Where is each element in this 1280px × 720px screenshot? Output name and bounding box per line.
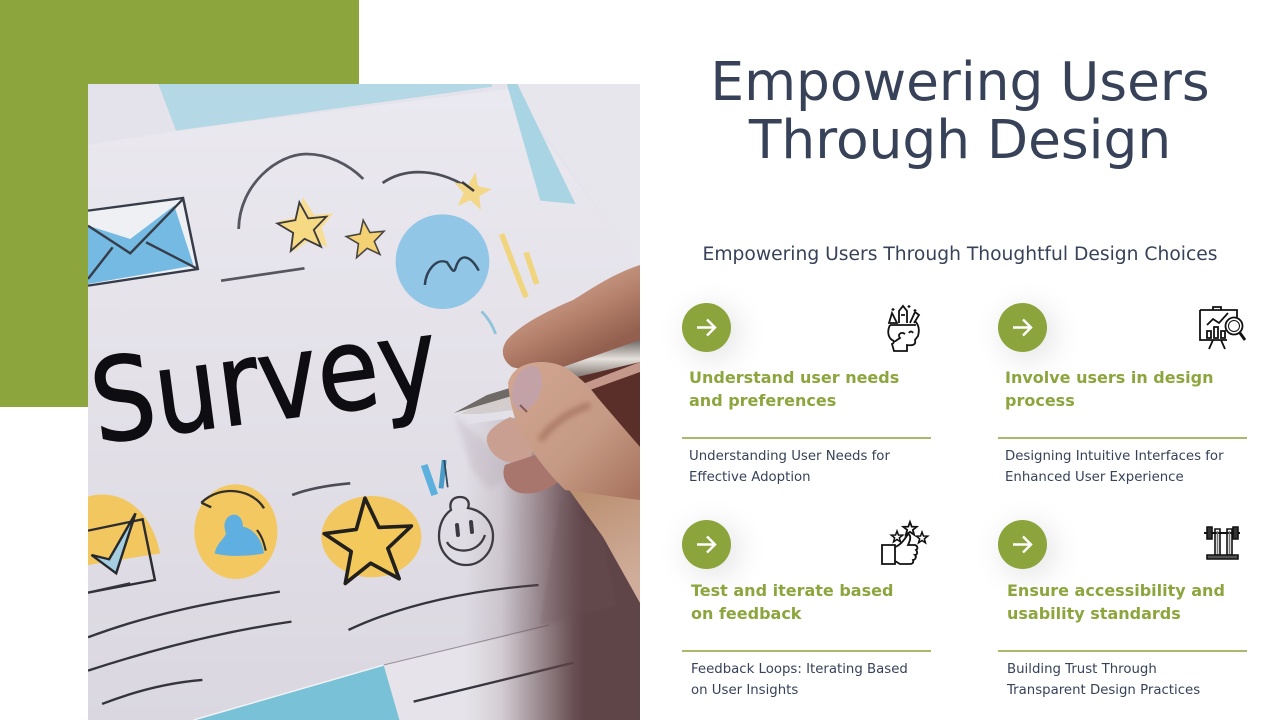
divider <box>998 437 1247 439</box>
index finger <box>503 265 640 375</box>
description: Designing Intuitive Interfaces for <box>1005 449 1224 464</box>
description: Feedback Loops: Iterating Based <box>691 662 908 677</box>
title: Through Design <box>749 108 1171 171</box>
heading: and preferences <box>689 391 836 410</box>
description: Transparent Design Practices <box>1007 683 1200 698</box>
lower sheet and blue paper <box>194 613 640 720</box>
divider <box>998 650 1247 652</box>
heading: Test and iterate based <box>691 581 893 600</box>
title: Empowering Users <box>710 50 1210 113</box>
card: understand user needs <box>682 303 931 485</box>
divider <box>682 650 931 652</box>
sketch: envelope <box>88 198 198 286</box>
card: test and iterate <box>682 520 931 698</box>
icon: presentation board with magnifier <box>1199 306 1246 350</box>
card: involve users <box>998 303 1247 485</box>
arrow badge <box>682 303 731 352</box>
heading <box>1007 581 1225 623</box>
description <box>689 449 890 485</box>
heading: usability standards <box>1007 604 1181 623</box>
arrow badge <box>998 520 1047 569</box>
subtitle: Empowering Users Through Thoughtful Design Choices <box>703 244 1217 265</box>
photo: hand writing on survey sheet <box>88 84 640 720</box>
description: Enhanced User Experience <box>1005 470 1184 485</box>
icon: thumbs up with stars <box>881 520 930 565</box>
description <box>691 662 908 698</box>
icon: head with creative tools <box>887 304 920 352</box>
divider <box>682 437 931 439</box>
heading: on feedback <box>691 604 801 623</box>
heading: process <box>1005 391 1075 410</box>
green background block <box>0 0 359 407</box>
description: Effective Adoption <box>689 470 811 485</box>
heading <box>689 368 899 410</box>
card: accessibility <box>998 520 1247 698</box>
heading <box>691 581 893 623</box>
description: on User Insights <box>691 683 798 698</box>
heading: Understand user needs <box>689 368 899 387</box>
sketch: check box <box>88 495 160 565</box>
sketch: user badge <box>194 484 277 579</box>
heading: Involve users in design <box>1005 368 1213 387</box>
title <box>710 50 1210 171</box>
arrow badge <box>998 303 1047 352</box>
thumb <box>508 362 640 500</box>
heading <box>1005 368 1213 410</box>
shadow of hand on sheet <box>462 400 640 720</box>
sketch: blue marks <box>424 465 435 495</box>
sketch: stars <box>275 169 494 259</box>
word: Survey: Survey <box>88 293 445 471</box>
sketch: smiley <box>439 497 493 565</box>
heading: Ensure accessibility and <box>1007 581 1225 600</box>
arm <box>555 430 640 603</box>
hand holding pen <box>454 265 640 603</box>
arrow badge <box>682 520 731 569</box>
description: Building Trust Through <box>1007 662 1157 677</box>
description <box>1006 662 1200 698</box>
sketch: blue circle <box>396 214 489 309</box>
sketch: pen lines <box>88 583 574 704</box>
icon: barbell on rack <box>1204 526 1240 560</box>
description <box>1005 449 1224 485</box>
paper corner highlight <box>540 500 617 625</box>
description: Understanding User Needs for <box>689 449 890 464</box>
pen <box>563 340 640 378</box>
lower fingers <box>487 417 540 465</box>
